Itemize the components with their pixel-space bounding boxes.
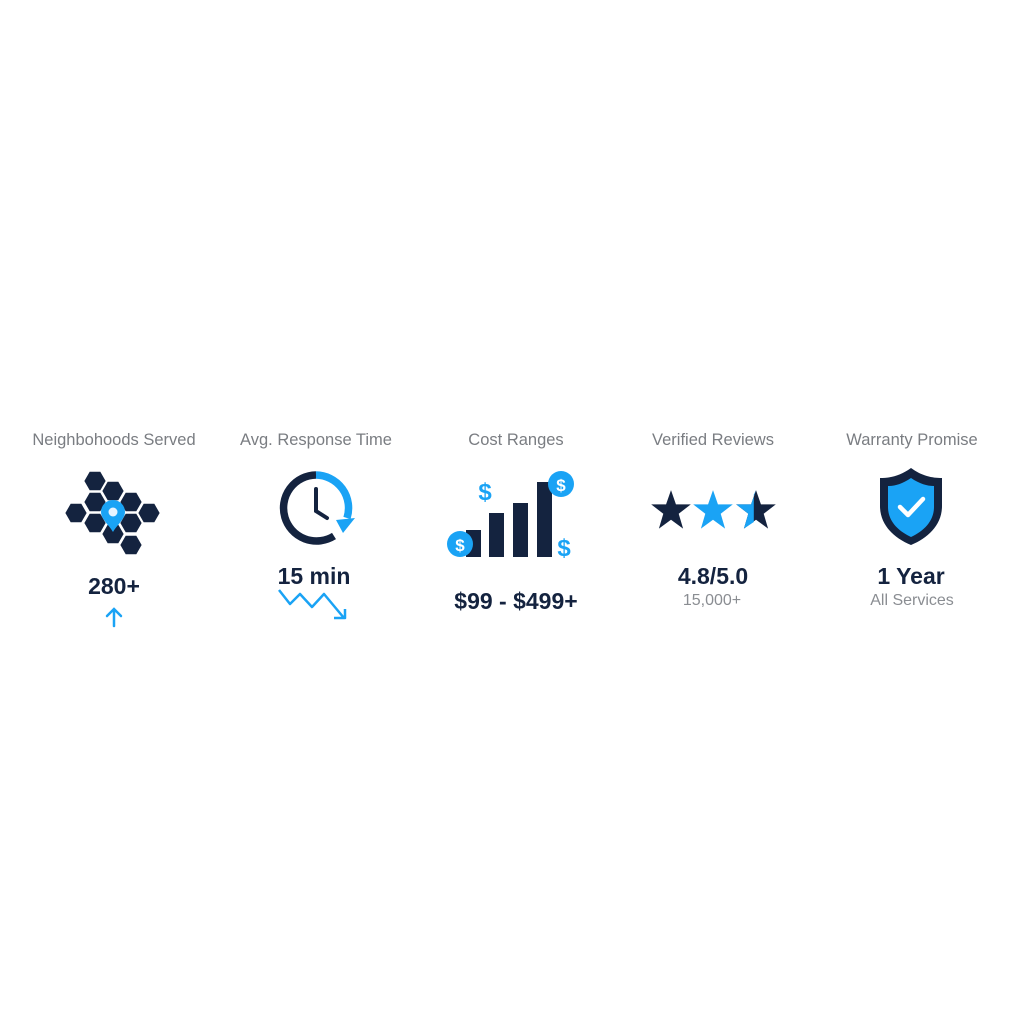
icon: bar chart with dollars: $ (557, 535, 571, 562)
sub: all services: All Services (870, 592, 954, 609)
value: rating: 4.8/5.0 (678, 563, 748, 589)
label: reviews: Verified Reviews (652, 431, 774, 449)
sub: review count: 15,000+ (683, 592, 741, 609)
label: neighborhoods: Neighbohoods Served (32, 431, 196, 449)
icon: bar chart with dollars: $ (556, 476, 566, 495)
label: response time: Avg. Response Time (240, 431, 392, 449)
value: 1 year: 1 Year (877, 563, 945, 589)
icon: zigzag down arrow (279, 590, 345, 618)
icon: up arrow (107, 609, 121, 626)
value: 280+: 280+ (88, 573, 140, 599)
label: cost ranges: Cost Ranges (468, 431, 564, 449)
icon: hexagon map (64, 471, 160, 555)
label: warranty: Warranty Promise (846, 431, 978, 449)
icon: stars (651, 490, 776, 529)
value: cost range: $99 - $499+ (454, 588, 578, 614)
icon: bar chart with dollars: $ (455, 536, 465, 555)
icon: bar chart with dollars: $ (478, 479, 492, 506)
icon: clock (284, 475, 355, 541)
icon: bar chart with dollars (447, 471, 574, 562)
value: 15 min: 15 min (278, 563, 350, 589)
icon: shield (880, 468, 942, 545)
